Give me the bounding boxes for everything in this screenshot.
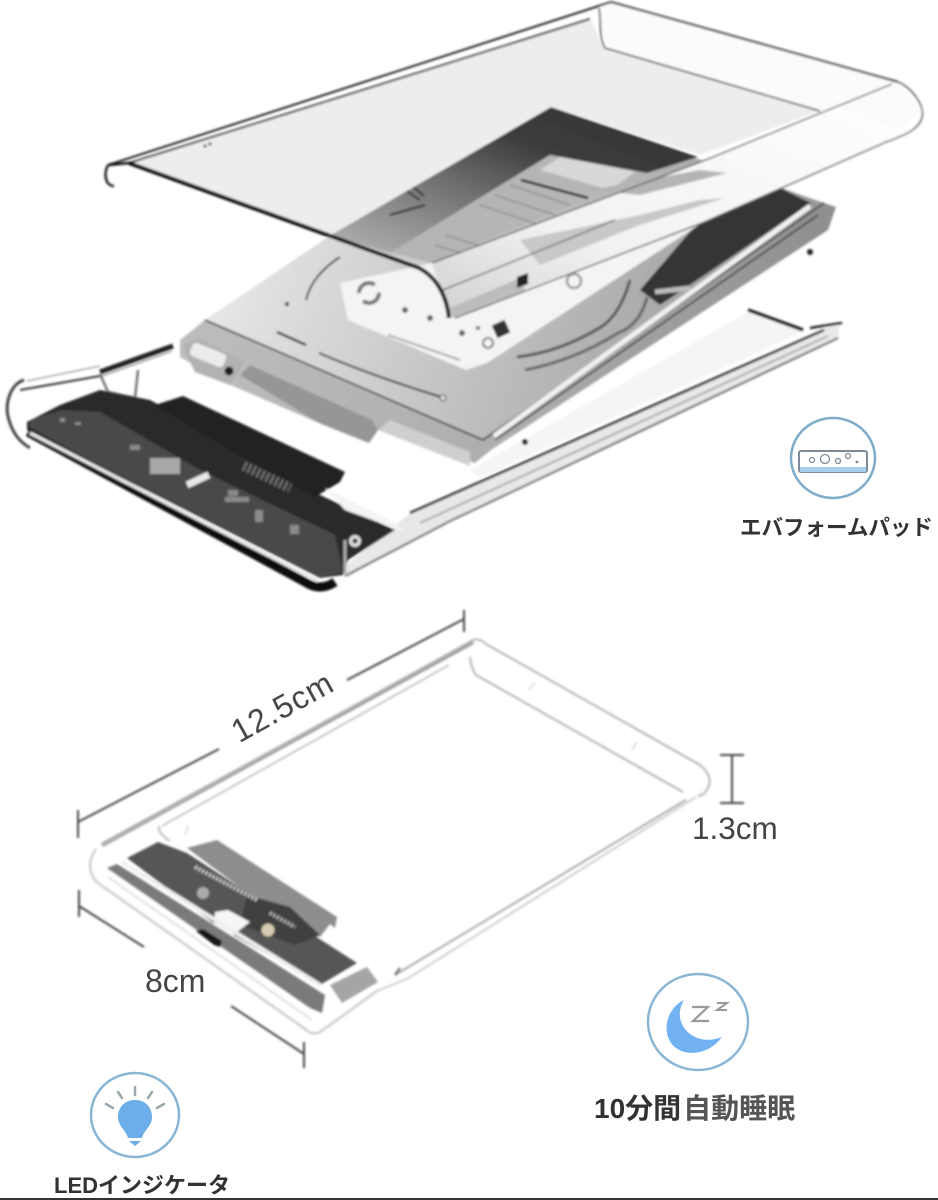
label: EVA foam pad: エバフォームパッド [740,516,933,540]
label: 8cm: 8cm [145,963,205,999]
label: 10 minute auto sleep: 10分間自動睡眠 [594,1093,795,1124]
tray: rails and PCB [7,310,842,587]
dimension: 12.5cm [78,610,464,838]
hard disk drive [180,107,836,466]
label: 1.3cm: 1.3cm [692,810,778,846]
label: LED indicator: LEDインジケータ [54,1173,230,1198]
dimension: 1.3cm [720,755,744,803]
icon: sleep moon [648,974,748,1070]
transparent lid [106,2,922,318]
label: 12.5cm: 12.5cm [225,664,340,750]
bottom edge band [0,1198,938,1200]
circuit board [107,842,378,1013]
clear enclosure outline [90,640,710,1033]
icon: LED bulb [91,1073,179,1157]
icon: EVA foam pad [791,418,875,498]
lower product view [78,610,744,1068]
dimension: 8cm [79,890,304,1068]
SATA connector [187,840,337,937]
exploded view of enclosure [7,2,922,587]
